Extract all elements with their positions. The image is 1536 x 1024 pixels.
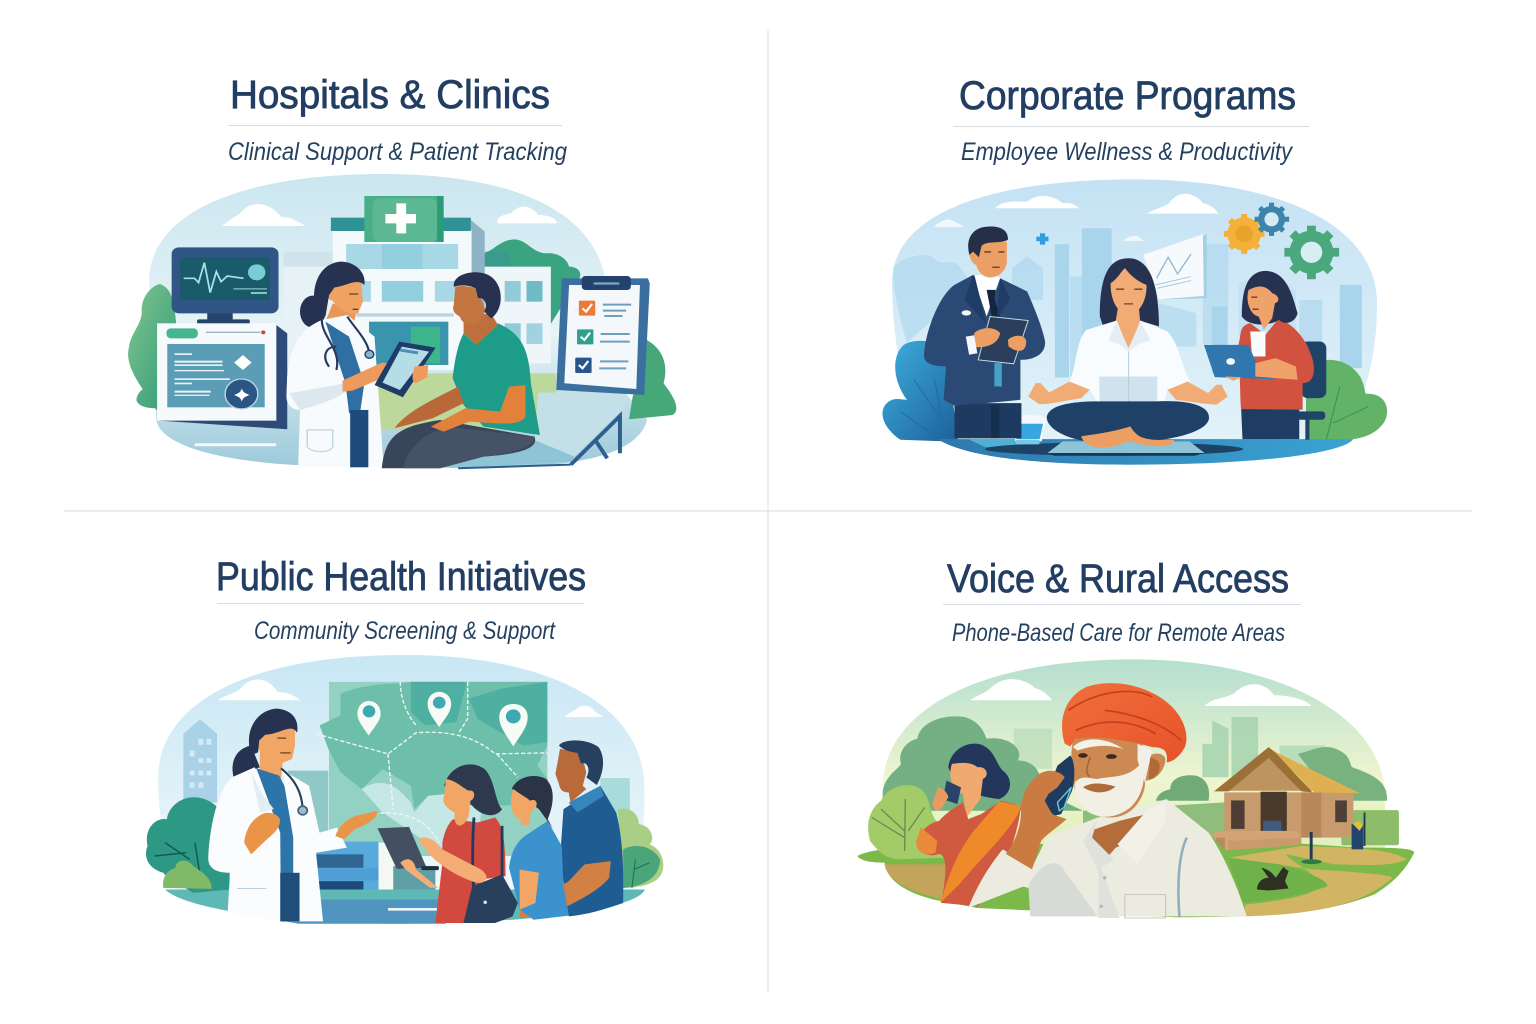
distant city [1014,717,1325,777]
doctor [286,262,393,467]
divider: horizontal [64,510,1472,512]
heading: voice: Voice & Rural Access [947,557,1289,601]
woman with laptop [1204,271,1314,439]
icon: plus [1036,233,1048,245]
patient bed [442,393,624,468]
patient [382,272,540,468]
icon: blue gear [1255,203,1289,236]
panel: hospitals and clinics [128,73,676,468]
hospital building [284,196,556,430]
ground mat [938,439,1353,465]
illustration: hospital consultation [128,174,676,468]
plants: right [1306,360,1387,440]
heading: hospitals: Hospitals & Clinics [230,73,550,117]
trees: behind hospital [484,239,580,327]
trees: right [629,338,676,419]
phone and hand [985,756,1074,888]
chair [1297,341,1326,440]
meditating woman [1028,258,1228,448]
clipboard checklist [556,276,650,395]
panel: voice and rural access [857,557,1414,918]
ground [165,890,645,924]
foreground clinic [288,771,630,900]
trees: left [146,797,230,893]
panel: corporate programs [882,74,1387,465]
cup [1012,415,1046,444]
bush left [868,785,946,859]
illustration: corporate wellness [882,179,1387,465]
ground [857,838,1414,917]
man [520,740,623,918]
illustration: rural phone care [857,659,1414,918]
businessman [924,227,1045,438]
icon: yellow gear [1224,214,1264,254]
subheading: voice: Phone-Based Care for Remote Areas [952,619,1285,647]
doctor [208,709,378,921]
tablet [377,827,439,888]
trees: right [618,808,663,888]
path [228,900,446,924]
child [509,776,569,920]
city skyline [893,228,1362,377]
panel: public health initiatives [146,555,663,924]
chart card [1143,233,1207,299]
subheading: corporate: Employee Wellness & Productivity [961,138,1293,166]
heading: corporate: Corporate Programs [959,74,1296,118]
divider: vertical [767,30,769,993]
monitor with heartbeat [172,247,279,324]
turban [1062,683,1186,762]
heading: public health: Public Health Initiatives [216,555,586,599]
map pins [357,692,528,747]
background trees [883,716,1399,851]
hut [1214,747,1365,891]
distant building [183,719,217,802]
plants: left [882,341,958,441]
illustration: community map [146,655,663,924]
farmer head [1071,734,1165,817]
patient record panel [157,323,287,446]
subheading: public health: Community Screening & Support [254,617,556,645]
woman on phone [916,744,1021,906]
woman with bag [418,764,518,923]
icon: green gear [1284,226,1339,279]
map [316,682,548,856]
trees: left [128,284,178,410]
tablet [375,342,436,397]
subheading: hospitals: Clinical Support & Patient Tracking [228,138,567,166]
farmer shirt [968,799,1247,918]
